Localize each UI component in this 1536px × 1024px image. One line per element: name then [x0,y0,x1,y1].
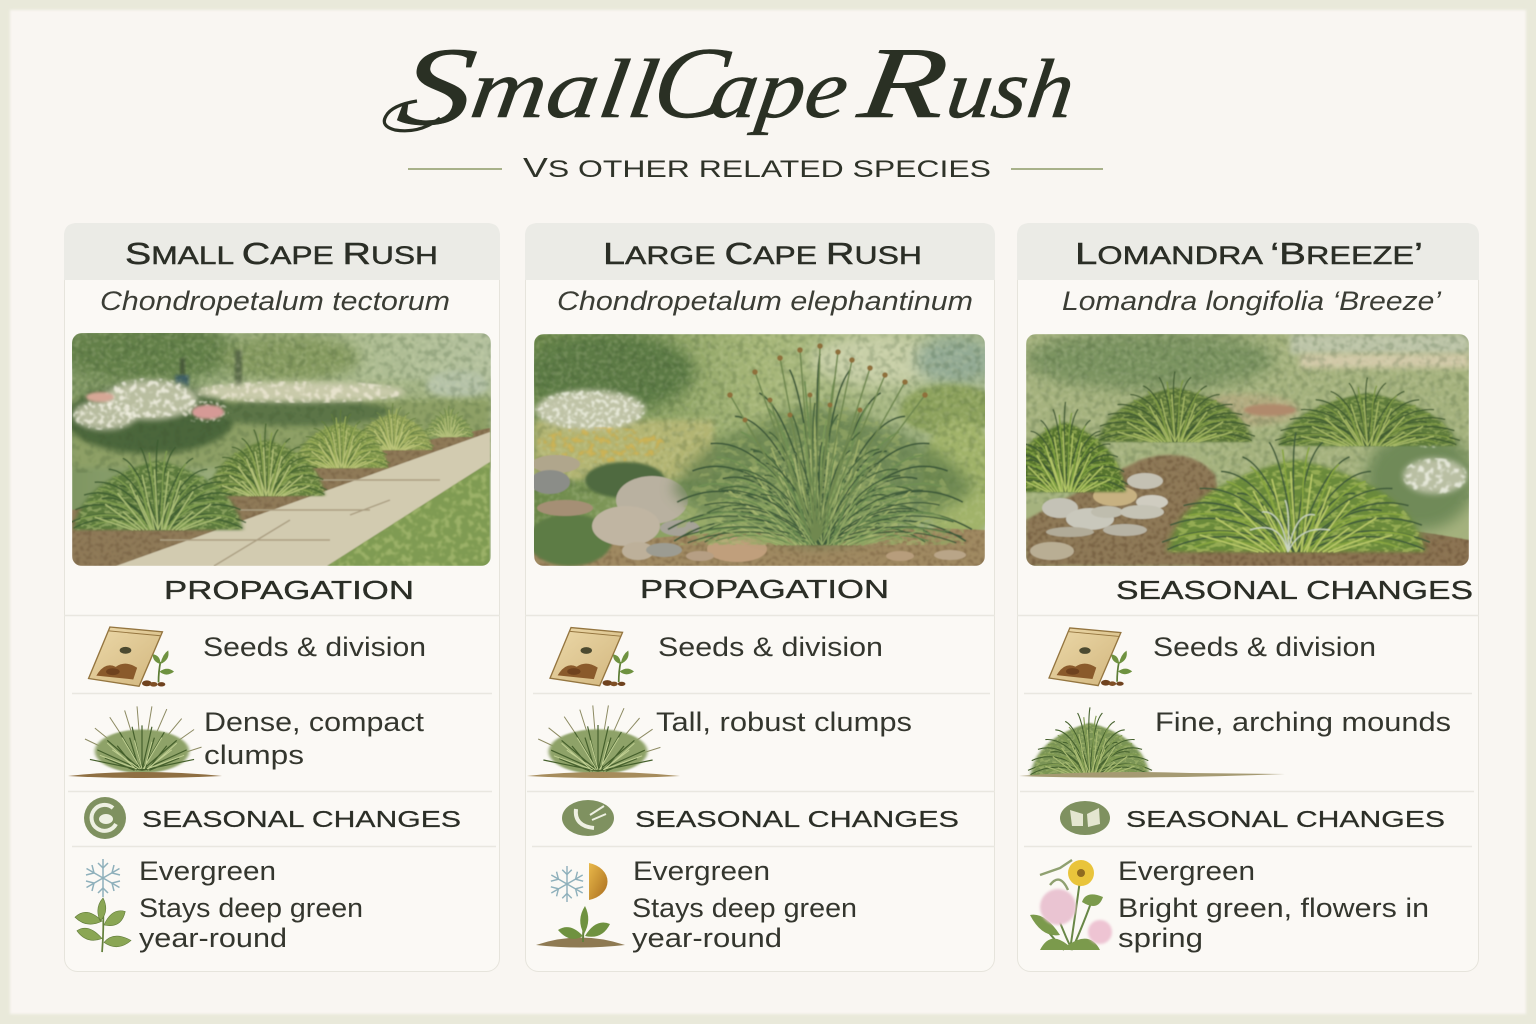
panel: large cape rush [525,223,1000,972]
seasonal text: Evergreen [633,856,770,886]
icon: green plant [75,898,131,952]
panel: lomandra breeze [1003,223,1479,972]
icon: seasonal badge [562,800,614,836]
species name: Chondropetalum tectorum [100,286,450,316]
icon: snowflake [86,859,120,897]
propagation text: Seeds & division [1153,632,1376,662]
propagation text: Seeds & division [658,632,883,662]
seasonal text: Stays deep green [139,893,363,923]
habit text: Dense, compact [204,707,425,737]
title: ape [705,43,854,136]
title: S [391,25,483,149]
title: R [851,27,955,140]
icon: clump [68,706,222,778]
icon: seed packet [89,627,174,687]
icon: grass mound [1019,707,1285,778]
icon: snowflake and autumn half [551,863,608,902]
species name: Lomandra longifolia ‘Breeze’ [1062,286,1442,316]
seasonal text: Evergreen [1118,856,1255,886]
section heading: seasonal changes: SEASONAL CHANGES [1126,806,1445,832]
seasonal text: Stays deep green [632,893,857,923]
section heading: seasonal changes: SEASONAL CHANGES [1116,575,1473,605]
habit text: clumps [204,740,304,770]
icon: clump [527,705,680,778]
title: mall [465,43,664,136]
photo: rocks and tall rush [525,332,1000,566]
seasonal text: Evergreen [139,856,276,886]
heading: SMALL CAPE RUSH [125,236,438,271]
panel: small cape rush [60,223,500,972]
heading: LARGE CAPE RUSH [603,236,922,271]
seasonal text: year-round [139,923,287,953]
seasonal text: year-round [632,923,782,953]
title [384,25,1083,149]
propagation text: Seeds & division [203,632,426,662]
icon: seed packet [1049,628,1132,686]
seasonal text: Bright green, flowers in [1118,893,1429,923]
section heading: propagation: PROPAGATION [164,575,414,605]
species name: Chondropetalum elephantinum [557,286,973,316]
photo: path with clumps [60,322,491,566]
icon: seed packet [550,628,634,686]
habit text: Tall, robust clumps [656,707,912,737]
heading: LOMANDRA ‘B REEZE ’ [1075,236,1423,271]
seasonal text: spring [1118,923,1203,953]
title: ush [941,43,1080,136]
icon: seedling [536,906,625,948]
icon: seasonal badge [84,797,126,839]
habit text: Fine, arching mounds [1155,707,1451,737]
icon: spring flowers [1030,860,1112,950]
title: C [647,27,736,140]
section heading: seasonal changes: SEASONAL CHANGES [635,806,959,832]
section heading: propagation: PROPAGATION [640,574,889,604]
section heading: seasonal changes: SEASONAL CHANGES [142,806,461,832]
icon: seasonal badge [1060,801,1110,835]
subtitle: V S OTHER RELATED SPECIES [523,152,991,183]
photo: rocks and grass mounds [1003,330,1475,566]
